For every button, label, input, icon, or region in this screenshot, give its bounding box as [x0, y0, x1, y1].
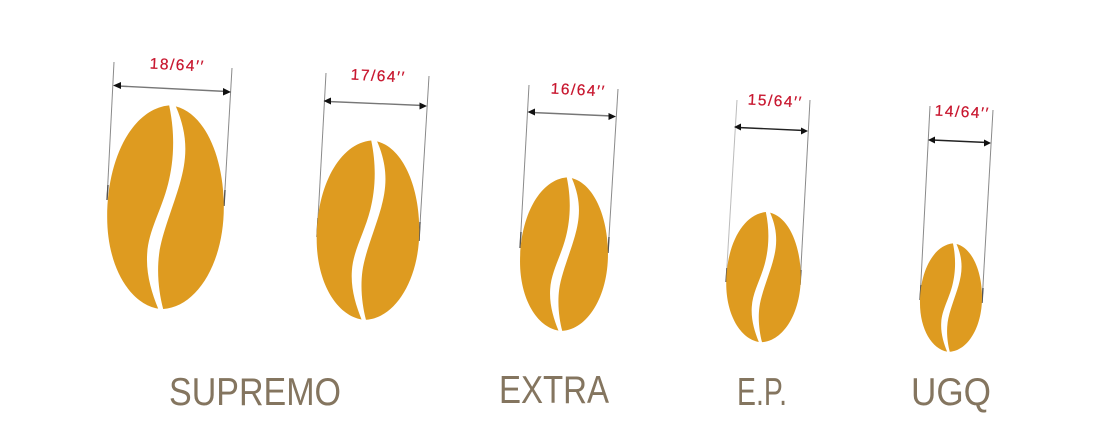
size group: UGQ 14/64 — [920, 103, 993, 352]
size group: E.P. 15/64 — [726, 92, 810, 342]
arrow: width 16/64 — [528, 108, 616, 120]
icon: coffee bean — [726, 212, 801, 342]
size group: EXTRA 16/64 — [520, 81, 618, 331]
size label 17/64: 17/64′′ — [350, 67, 406, 86]
guide line right — [982, 110, 993, 303]
size group: SUPREMO 18/64 — [107, 56, 232, 309]
guide line right — [224, 68, 232, 206]
size group: 17/64 — [317, 67, 429, 320]
heading: EXTRA: EXTRA — [499, 369, 609, 412]
arrow: width 18/64 — [113, 82, 231, 96]
guide line left — [920, 106, 930, 300]
icon: coffee bean — [107, 105, 224, 309]
size label 15/64: 15/64′′ — [747, 92, 803, 111]
heading: SUPREMO: SUPREMO — [169, 371, 341, 414]
guide line right — [608, 89, 618, 253]
guide line left — [317, 73, 326, 237]
guide line right — [800, 100, 810, 285]
guide line left — [107, 62, 114, 200]
heading: UGQ: UGQ — [911, 371, 991, 414]
guide line left — [726, 100, 737, 282]
size label 14/64: 14/64′′ — [934, 103, 990, 122]
guide line right — [419, 76, 429, 241]
icon: coffee bean — [520, 177, 608, 331]
icon: coffee bean — [317, 141, 419, 320]
guide line left — [520, 85, 529, 248]
arrow: width 17/64 — [324, 98, 427, 110]
arrow: width 14/64 — [928, 136, 991, 146]
size label 16/64: 16/64′′ — [550, 81, 606, 100]
icon: coffee bean — [920, 243, 982, 352]
size label 18/64: 18/64′′ — [149, 56, 205, 75]
arrow: width 15/64 — [734, 124, 808, 134]
heading: E.P.: E.P. — [737, 371, 787, 414]
